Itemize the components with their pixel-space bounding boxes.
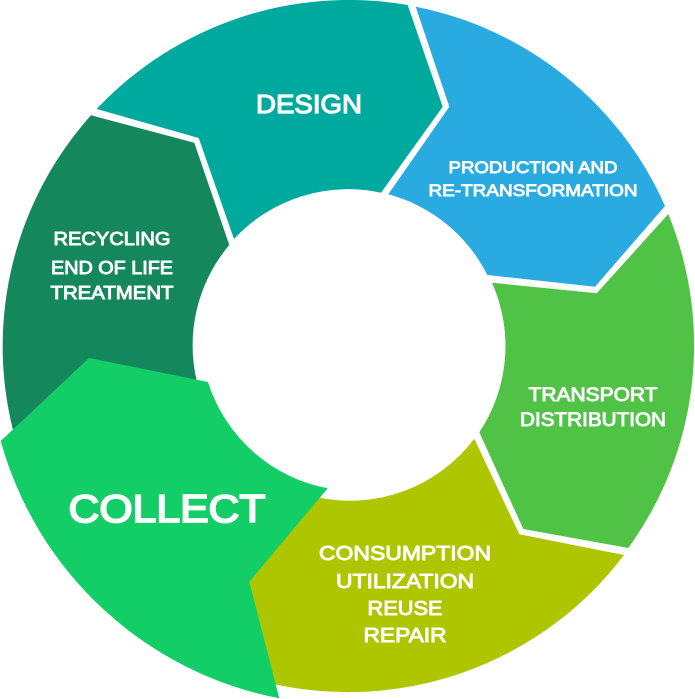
panel: recycling segment (3, 115, 229, 440)
panel: transport segment: DISTRIBUTION (520, 410, 666, 431)
panel: recycling segment: RECYCLING (54, 229, 170, 249)
panel: design segment: DESIGN (256, 89, 362, 119)
panel: consumption segment: CONSUMPTION (319, 543, 491, 565)
panel: production segment: PRODUCTION AND (448, 158, 618, 177)
panel: consumption segment: UTILIZATION (336, 571, 474, 593)
panel: consumption segment: REUSE (368, 598, 442, 620)
panel: transport segment: TRANSPORT (528, 385, 658, 406)
panel: production segment: RE-TRANSFORMATION (428, 181, 638, 200)
panel: consumption segment (235, 439, 624, 692)
panel: design segment (97, 0, 443, 239)
panel: consumption segment: REPAIR (364, 625, 446, 647)
panel: production segment (388, 7, 665, 287)
panel: recycling segment: TREATMENT (50, 283, 174, 303)
panel: recycling segment: END OF LIFE (51, 258, 173, 278)
panel: collect segment (1, 358, 328, 698)
panel: transport segment (479, 214, 694, 548)
panel: collect segment: COLLECT (68, 488, 266, 531)
